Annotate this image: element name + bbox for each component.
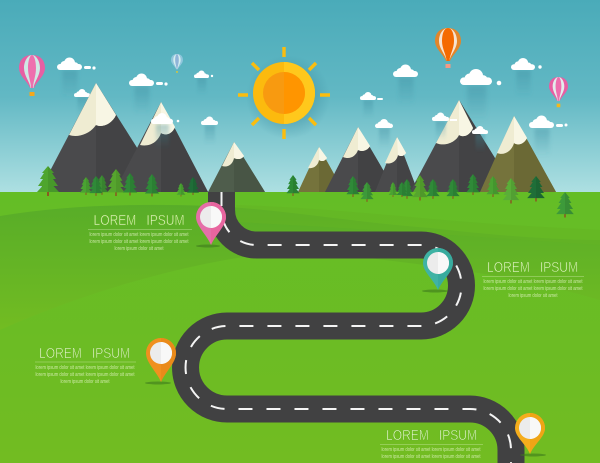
mountain 8 [480, 116, 556, 192]
text block: bottom: lorem ipsum dolor sit amet lorem ipsum dolor sit amet [382, 447, 481, 453]
text block: left [35, 345, 136, 385]
text block: right: lorem ipsum dolor sit amet lorem ipsum dolor sit amet [484, 286, 583, 292]
text block: bottom [380, 427, 483, 460]
balloon: pink right [549, 77, 568, 107]
text block: bottom: lorem ipsum dolor sit amet lorem ipsum dolor sit amet [382, 454, 481, 460]
text block: top left [88, 212, 192, 252]
sun [238, 47, 330, 139]
mountains [39, 83, 556, 192]
text block: top left: LOREM IPSUM [94, 212, 184, 229]
ground [0, 192, 600, 463]
trees [37, 166, 574, 218]
text block: right: lorem ipsum dolor sit amet [508, 293, 558, 299]
mountain 5 [325, 127, 396, 192]
winding road [186, 192, 511, 463]
text block: left: lorem ipsum dolor sit amet lorem ipsum dolor sit amet [36, 365, 135, 371]
cloud in front of mountains [151, 112, 488, 152]
text block: top left: lorem ipsum dolor sit amet lorem ipsum dolor sit amet [90, 232, 189, 238]
text block: left: lorem ipsum dolor sit amet lorem ipsum dolor sit amet [36, 372, 135, 378]
balloon: pink left [19, 55, 45, 96]
pin: pink [196, 202, 226, 248]
mountain 1 [39, 83, 165, 192]
mountain 4 [298, 147, 344, 192]
balloons [19, 28, 568, 107]
pin: yellow [515, 413, 546, 456]
text block: top left: lorem ipsum dolor sit amet lorem ipsum dolor sit amet [90, 239, 189, 245]
mountain 7 [410, 100, 516, 192]
mountain 2 [114, 102, 208, 192]
mountain 3 [208, 142, 265, 192]
text block: right [482, 259, 584, 299]
balloon: light blue [171, 54, 183, 73]
text block: left: LOREM IPSUM [39, 345, 130, 362]
clouds [57, 58, 568, 156]
pin: teal [422, 248, 453, 292]
text block: bottom: LOREM IPSUM [386, 427, 477, 444]
sky background [0, 0, 600, 193]
pin: orange [145, 338, 176, 384]
text block: left: lorem ipsum dolor sit amet [60, 379, 110, 385]
balloon: orange [435, 28, 461, 68]
mountain 6 [375, 137, 418, 192]
text block: right: lorem ipsum dolor sit amet lorem ipsum dolor sit amet [484, 279, 583, 285]
text block: top left: lorem ipsum dolor sit amet [114, 246, 164, 252]
text block: right: LOREM IPSUM [487, 259, 578, 276]
